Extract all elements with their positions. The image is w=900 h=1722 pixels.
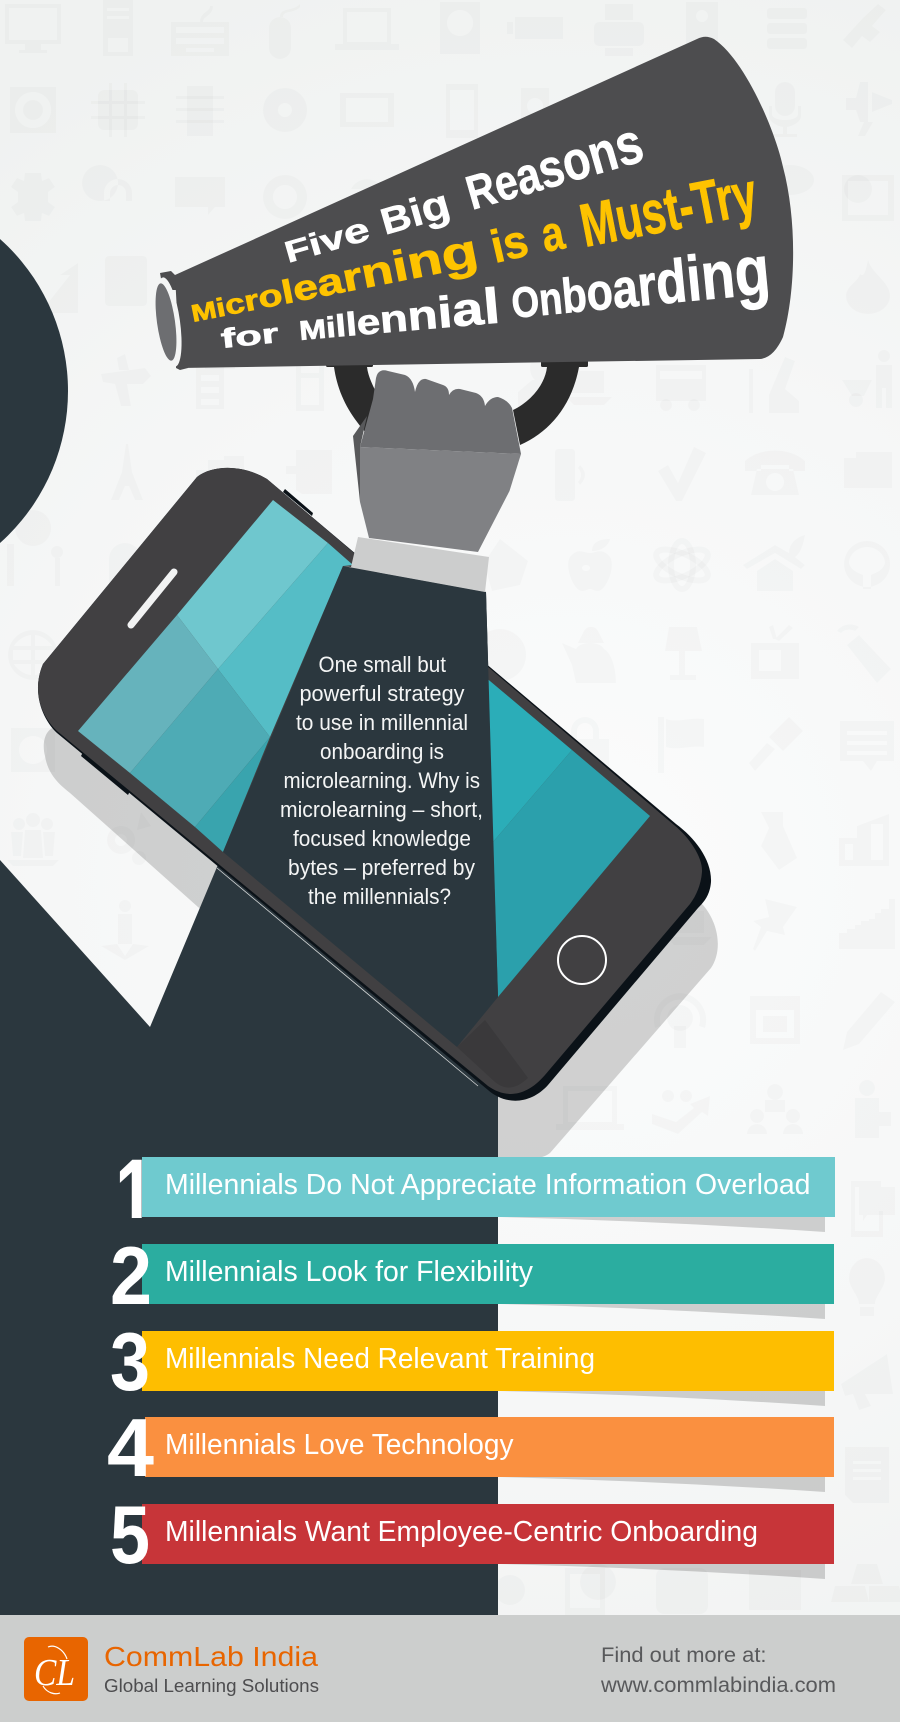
bar shadow 4 bbox=[500, 1477, 825, 1492]
reason 1: 1 bbox=[115, 1138, 155, 1255]
title line 2: is bbox=[486, 214, 533, 273]
reason 5 bbox=[110, 1488, 834, 1581]
arm overlay across the screen bbox=[223, 566, 498, 1047]
title line 3: Onboarding bbox=[507, 230, 773, 333]
phone side buttons bbox=[81, 489, 313, 795]
megaphone rim ring bbox=[152, 276, 186, 368]
brand name: CommLab India bbox=[104, 1641, 318, 1672]
screen facet: deep teal bbox=[130, 669, 270, 827]
reason 4: 4 bbox=[107, 1401, 154, 1494]
fist knuckles bbox=[360, 370, 521, 454]
phone edge highlight bbox=[217, 868, 478, 1086]
reason 4: Millennials Love Technology bbox=[165, 1429, 514, 1461]
reason 2: 2 bbox=[110, 1229, 152, 1322]
home button bbox=[558, 936, 606, 984]
intro text: microlearning. Why is bbox=[284, 768, 480, 793]
megaphone bbox=[152, 37, 793, 370]
reason 1: Millennials Do Not Appreciate Information Overload bbox=[165, 1169, 810, 1201]
reason 2 bbox=[110, 1229, 834, 1322]
screen facet: light teal bbox=[177, 500, 328, 669]
bar shadow 3 bbox=[500, 1391, 825, 1406]
phone body edge bbox=[38, 468, 711, 1101]
intro text: One small but bbox=[318, 652, 446, 677]
phone long shadow bbox=[44, 650, 718, 1157]
smartphone bbox=[38, 468, 711, 1101]
intro text: powerful strategy bbox=[300, 681, 464, 706]
reason 3: Millennials Need Relevant Training bbox=[165, 1343, 595, 1375]
wrist shadow bbox=[353, 416, 367, 502]
intro text: bytes – preferred by bbox=[288, 855, 475, 880]
title line 3: Millennial bbox=[296, 277, 502, 351]
speaker slit bbox=[131, 572, 174, 625]
bar shadow 5 bbox=[500, 1564, 825, 1579]
title line 2: a bbox=[537, 206, 569, 263]
website url: www.commlabindia.com bbox=[600, 1674, 836, 1697]
reason 2: Millennials Look for Flexibility bbox=[165, 1256, 533, 1288]
reason 5: Millennials Want Employee-Centric Onboarding bbox=[165, 1516, 758, 1548]
head silhouette bbox=[0, 187, 68, 595]
find out more label: Find out more at: bbox=[601, 1644, 766, 1667]
brand tagline: Global Learning Solutions bbox=[104, 1676, 319, 1696]
reason 3: 3 bbox=[110, 1315, 150, 1408]
shirt cuff bbox=[343, 537, 489, 592]
screen facet: darker teal bbox=[195, 737, 270, 852]
screen facet: right bright teal bbox=[484, 676, 572, 842]
reason 4 bbox=[107, 1401, 834, 1494]
phone face bbox=[38, 468, 702, 1094]
screen facet: right dark teal bbox=[493, 750, 650, 997]
title line 2 bbox=[185, 160, 762, 332]
intro text: to use in millennial bbox=[296, 710, 468, 735]
megaphone handle bbox=[326, 358, 588, 445]
bezel shade bbox=[457, 1020, 528, 1088]
title line 3: for bbox=[219, 317, 280, 354]
intro text: the millennials? bbox=[308, 884, 451, 909]
megaphone opening bbox=[152, 282, 180, 362]
title line 1 bbox=[279, 111, 650, 270]
title line 1: Reasons bbox=[458, 111, 650, 223]
title line 1: Big bbox=[375, 181, 455, 244]
megaphone rim lips bbox=[160, 271, 190, 370]
screen facet: mid teal bbox=[218, 543, 353, 737]
intro text: onboarding is bbox=[320, 739, 444, 764]
intro text: focused knowledge bbox=[293, 826, 471, 851]
intro text: microlearning – short, bbox=[280, 797, 483, 822]
reason 5: 5 bbox=[110, 1488, 150, 1581]
hand fist bbox=[353, 370, 521, 552]
suit body and arm bbox=[0, 566, 498, 1615]
bar shadow 1 bbox=[500, 1217, 825, 1232]
logo mark bbox=[24, 1637, 88, 1701]
wrist bbox=[360, 447, 521, 552]
title line 1: Five bbox=[279, 209, 374, 270]
footer band bbox=[0, 1615, 900, 1722]
intro text bbox=[280, 652, 483, 909]
title line 2: Microlearning bbox=[185, 224, 482, 332]
logo mark: CL bbox=[34, 1652, 75, 1694]
screen facet: grey teal bbox=[78, 615, 218, 773]
reason 3 bbox=[110, 1315, 834, 1408]
bar shadow 2 bbox=[500, 1304, 825, 1319]
title on megaphone bbox=[185, 111, 773, 354]
title line 2: Must-Try bbox=[575, 160, 762, 261]
megaphone cone bbox=[175, 37, 793, 368]
title line 3 bbox=[219, 230, 773, 354]
reason 1 bbox=[120, 1157, 835, 1218]
